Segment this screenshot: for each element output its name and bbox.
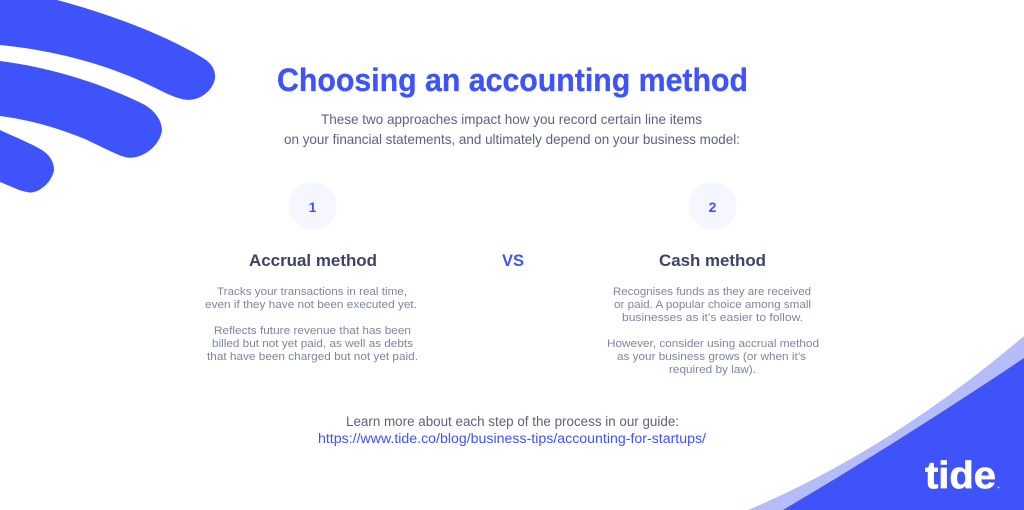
cash description bbox=[607, 286, 819, 376]
panel: accrual method bbox=[205, 182, 418, 363]
accrual description: billed but not yet paid, as well as debts bbox=[212, 338, 414, 350]
title: Choosing an accounting method bbox=[277, 62, 748, 98]
intro text: on your financial statements, and ultimately depend on your business model: bbox=[284, 131, 740, 147]
cash description: businesses as it’s easier to follow. bbox=[622, 312, 803, 324]
decorative curve: bottom right with logo bbox=[748, 336, 1024, 510]
accrual description: even if they have not been executed yet. bbox=[205, 299, 417, 311]
footer text bbox=[318, 414, 706, 446]
cash description: Recognises funds as they are received bbox=[613, 286, 811, 298]
number badge 1 bbox=[288, 182, 336, 230]
accrual description bbox=[205, 286, 418, 363]
footer text: Learn more about each step of the process in our guide: bbox=[346, 414, 679, 429]
cash description: or paid. A popular choice among small bbox=[614, 299, 811, 311]
vs label: VS bbox=[502, 252, 524, 270]
accrual description: that have been charged but not yet paid. bbox=[207, 351, 418, 363]
number badge 1: 1 bbox=[309, 199, 317, 215]
intro text: These two approaches impact how you record certain line items bbox=[321, 111, 702, 127]
decorative arcs: top left bbox=[0, 0, 215, 192]
logo: tide: tide bbox=[925, 455, 996, 497]
intro text bbox=[284, 111, 740, 147]
number badge 2: 2 bbox=[709, 199, 717, 215]
number badge 2 bbox=[688, 182, 736, 230]
footer text: https://www.tide.co/blog/business-tips/accounting-for-startups/ bbox=[318, 431, 706, 446]
accrual description: Reflects future revenue that has been bbox=[214, 325, 411, 337]
cash description: as your business grows (or when it’s bbox=[617, 351, 807, 363]
panel: cash method bbox=[607, 182, 819, 376]
cash description: required by law). bbox=[669, 364, 756, 376]
heading: cash method: Cash method bbox=[659, 252, 766, 270]
cash description: However, consider using accrual method bbox=[607, 338, 819, 350]
accrual description: Tracks your transactions in real time, bbox=[217, 286, 407, 298]
heading: accrual method: Accrual method bbox=[249, 252, 377, 270]
